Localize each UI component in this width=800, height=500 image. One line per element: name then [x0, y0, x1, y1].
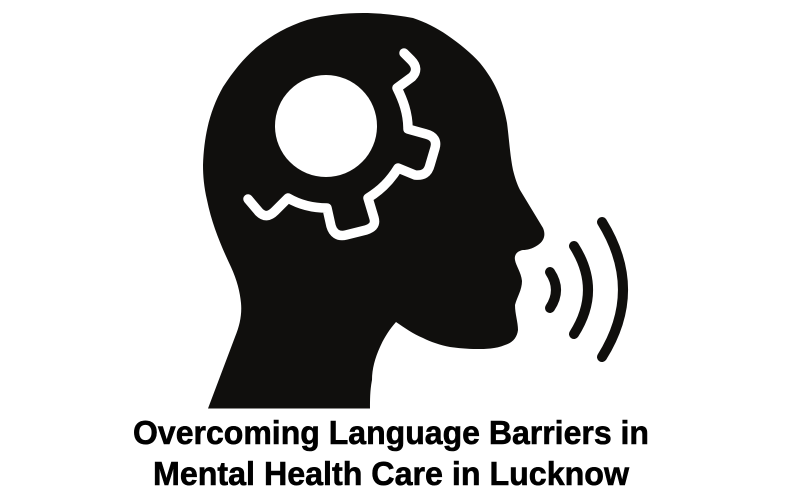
- speech wave medium: [574, 246, 588, 334]
- speech wave large: [602, 222, 623, 357]
- title line 2: Mental Health Care in Lucknow: [153, 455, 629, 492]
- speech wave small: [550, 272, 556, 308]
- gear outline: [248, 53, 436, 236]
- brain circle: [275, 75, 377, 177]
- head silhouette: [203, 13, 544, 408]
- title: [133, 414, 649, 492]
- title line 1: Overcoming Language Barriers in: [133, 414, 649, 451]
- icon: head profile with gear and speech waves: [203, 13, 623, 408]
